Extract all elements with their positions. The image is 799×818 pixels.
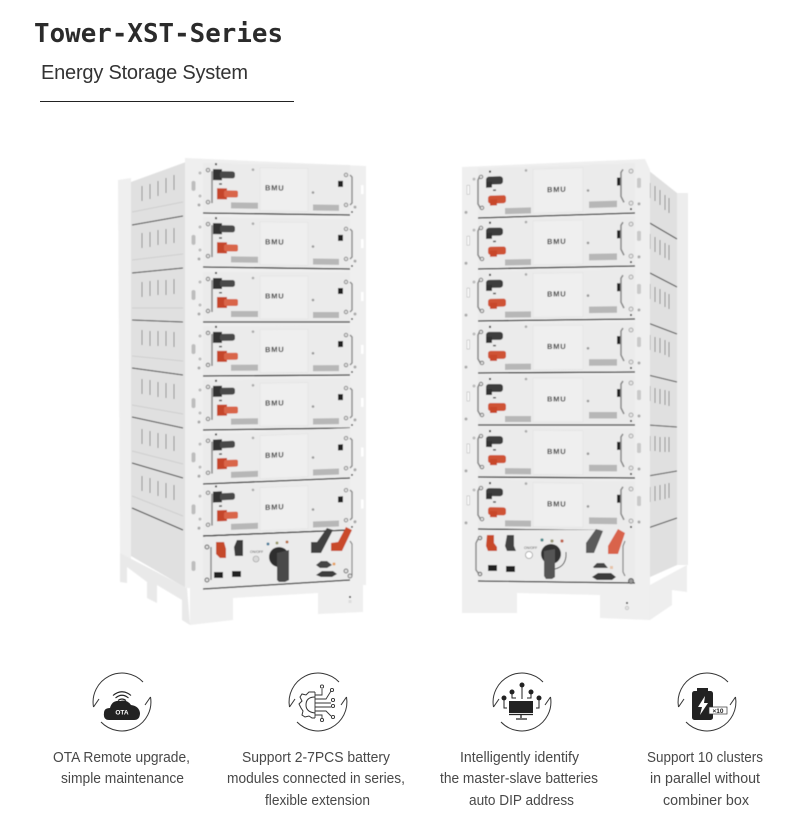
right tower module 7: BMU xyxy=(547,499,566,509)
caption: Intelligently identify xyxy=(460,750,580,766)
left tower module 2 xyxy=(192,217,364,269)
right tower front frame xyxy=(462,159,650,620)
left tower control module xyxy=(192,527,352,603)
caption: Support 10 clusters xyxy=(647,750,763,766)
right tower module 4 xyxy=(464,322,641,373)
left tower module 5 xyxy=(192,378,364,430)
left tower module 7 xyxy=(192,479,364,536)
left tower module 3: BMU xyxy=(265,292,284,300)
right tower module 2 xyxy=(464,216,641,269)
feature: master-slave identification: auto DIP address xyxy=(469,793,574,809)
right tower module 6 xyxy=(464,427,641,478)
right tower module 4: BMU xyxy=(547,342,566,351)
icon: gear and circuit xyxy=(289,673,347,731)
left tower front frame xyxy=(185,158,366,625)
right tower side panels xyxy=(648,170,688,620)
feature: module extension: modules connected in series, xyxy=(227,771,405,787)
right tower module 2: BMU xyxy=(547,237,566,246)
right tower module 3 xyxy=(464,269,641,321)
right tower module 1: BMU xyxy=(547,185,566,194)
right tower module 5 xyxy=(464,375,641,425)
caption: OTA Remote upgrade, xyxy=(53,750,190,766)
right tower module 1 xyxy=(464,163,641,218)
feature: master-slave identification: the master-slave batteries xyxy=(440,771,598,787)
left tower module 1: BMU xyxy=(265,183,284,193)
right tower module 6: BMU xyxy=(547,447,566,456)
left tower side panels xyxy=(118,162,190,625)
feature: OTA remote upgrade: simple maintenance xyxy=(61,771,184,787)
feature: parallel clusters xyxy=(647,673,763,809)
caption: Support 2-7PCS battery xyxy=(242,750,391,766)
left tower module 6 xyxy=(192,427,364,484)
feature: module extension xyxy=(227,673,405,809)
feature: parallel clusters: in parallel without xyxy=(650,771,760,787)
feature: master-slave identification xyxy=(440,673,598,809)
left tower module 5: BMU xyxy=(265,398,284,408)
left tower module 7: BMU xyxy=(265,502,284,512)
heading rule xyxy=(40,100,294,102)
right battery tower xyxy=(462,159,688,620)
feature: parallel clusters: combiner box xyxy=(663,793,750,809)
left tower module 3 xyxy=(192,272,364,322)
left battery tower xyxy=(118,158,366,625)
title: Tower-XST-Series xyxy=(34,19,283,49)
left tower module 4: BMU xyxy=(265,345,284,354)
left tower module 1 xyxy=(192,163,364,215)
icon: monitor network xyxy=(493,673,551,731)
left tower module 6: BMU xyxy=(265,450,284,460)
left tower module 4 xyxy=(192,325,364,376)
right tower module 3: BMU xyxy=(547,289,566,299)
left tower module 2: BMU xyxy=(265,237,284,247)
icon: OTA cloud: OTA xyxy=(115,710,129,716)
right tower module 5: BMU xyxy=(547,394,566,404)
left tower control module: ON/OFF xyxy=(250,550,263,554)
right tower control module xyxy=(476,529,635,610)
subtitle: Energy Storage System xyxy=(41,62,248,84)
icon: battery times ten: ×10 xyxy=(712,708,724,715)
right tower module 7 xyxy=(464,479,641,531)
feature: OTA remote upgrade xyxy=(53,673,190,787)
feature: module extension: flexible extension xyxy=(265,793,370,809)
right tower control module: ON/OFF xyxy=(524,546,537,550)
